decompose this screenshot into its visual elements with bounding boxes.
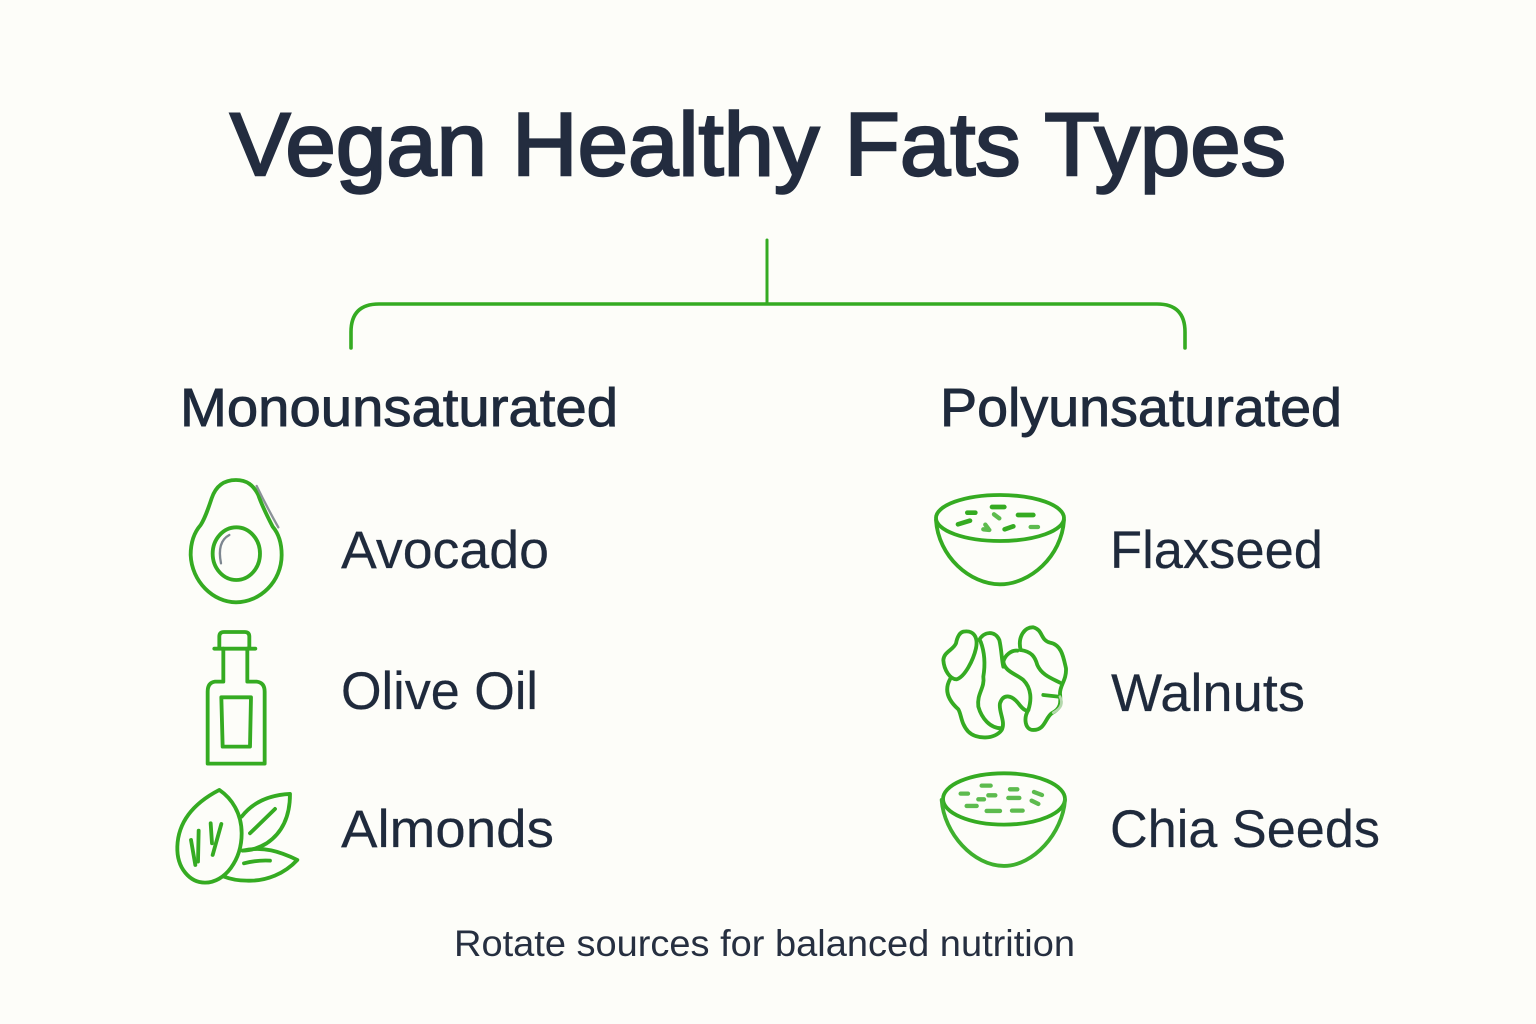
icon: chia seeds bowl [942,773,1065,866]
heading: Polyunsaturated: Polyunsaturated [940,378,1342,438]
icon: avocado [191,480,282,602]
icon: olive oil bottle [208,632,265,764]
icon: flaxseed bowl [936,495,1064,584]
label: Walnuts: Walnuts [1111,664,1305,723]
label: Olive Oil: Olive Oil [341,662,538,721]
icon: almonds and leaves [177,790,297,883]
tree connector [351,240,1185,348]
label: Chia Seeds: Chia Seeds [1110,800,1380,859]
icon: walnut [943,627,1066,737]
label: Avocado: Avocado [341,521,549,580]
title: Vegan Healthy Fats Types [230,94,1286,194]
label: Almonds: Almonds [341,800,554,859]
caption: Rotate sources for balanced nutrition [454,923,1075,964]
label: Flaxseed: Flaxseed [1110,521,1323,580]
heading: Monounsaturated: Monounsaturated [180,378,618,438]
